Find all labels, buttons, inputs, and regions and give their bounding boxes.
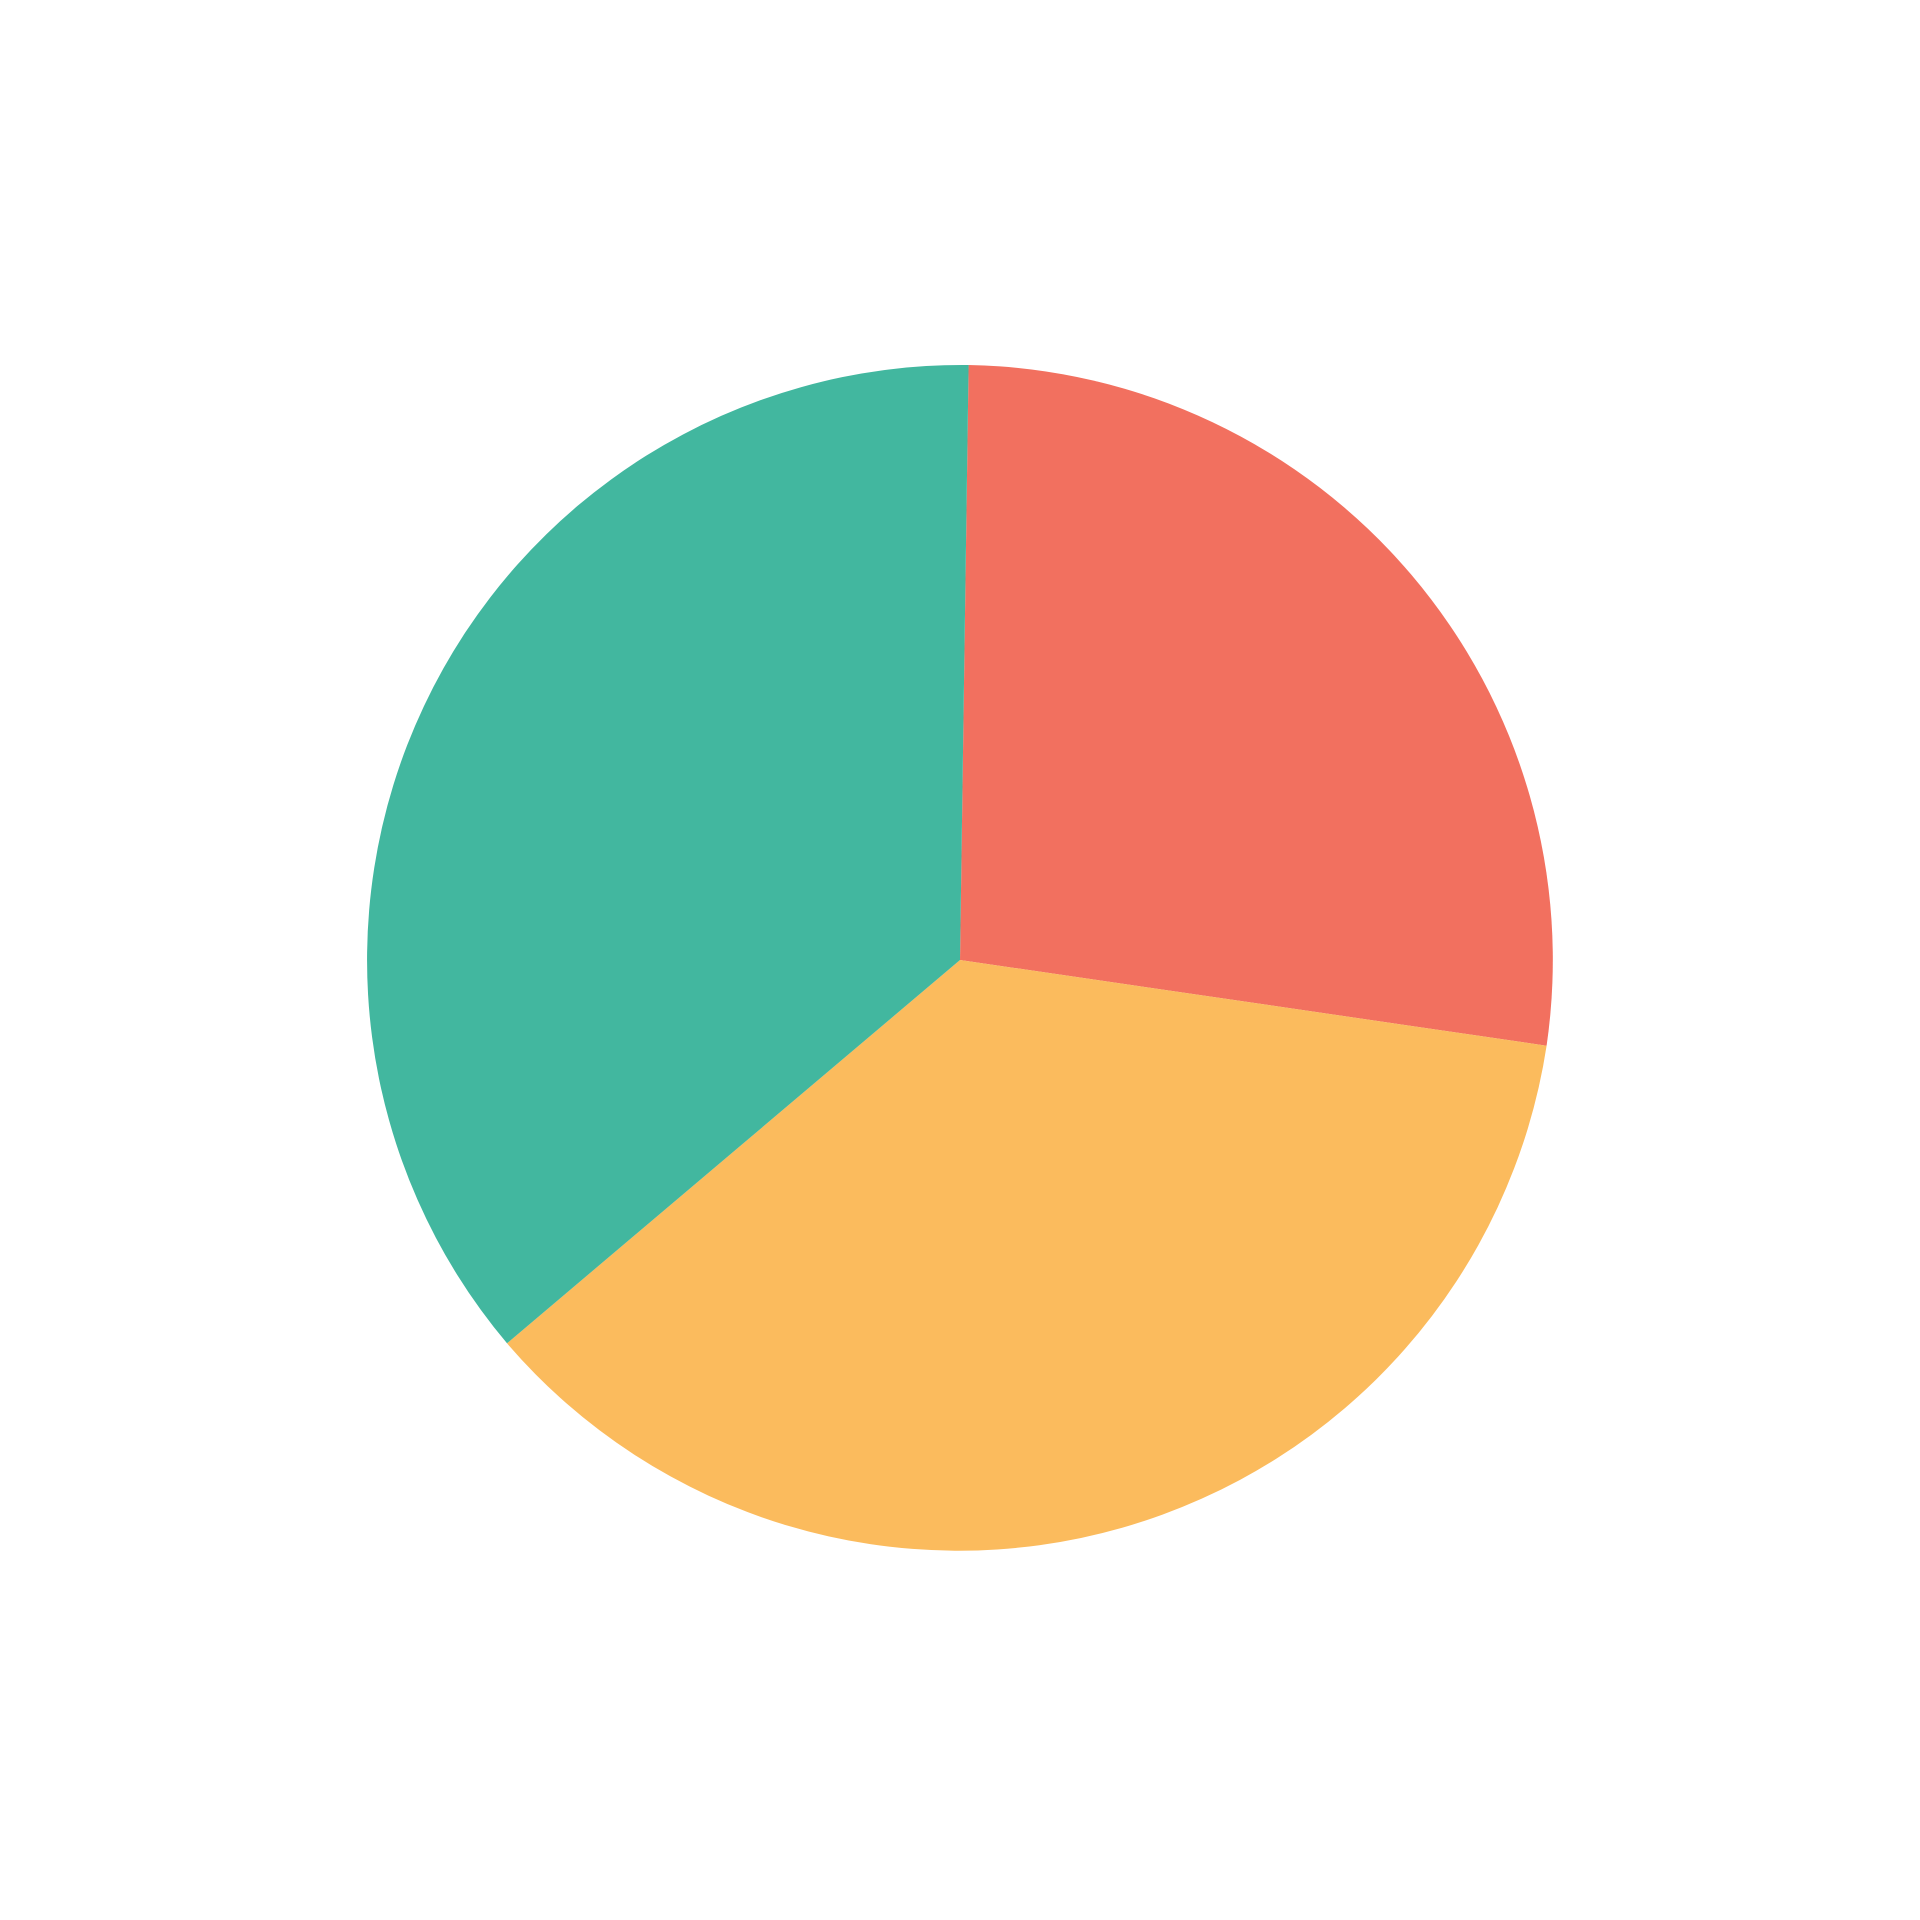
slice: yellow [507,960,1547,1551]
slice: green [367,365,969,1343]
slice: red [960,365,1553,1046]
